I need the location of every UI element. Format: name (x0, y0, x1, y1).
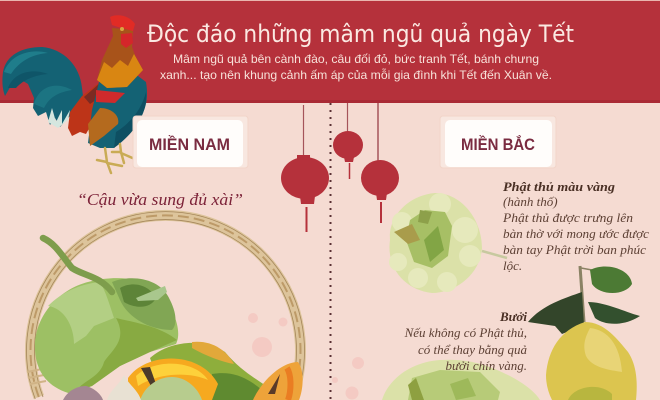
text: phat thu (502, 179, 649, 273)
text: phat thu: bàn thờ với mong ước được (503, 226, 649, 241)
buddha hand fruit: upper (389, 193, 507, 293)
text: phat thu: (hành thố) (503, 194, 558, 209)
text: phat thu: lộc. (503, 258, 522, 273)
quote: “Cậu vừa sung đủ xài” (77, 190, 243, 209)
text: buoi: bưởi chín vàng. (445, 358, 527, 373)
text: buoi: Bưởi (499, 309, 527, 324)
center dotted divider (330, 103, 332, 400)
sugar apple (140, 377, 202, 400)
buddha hand fruit: lower (382, 360, 540, 400)
blossoms decoration (248, 313, 364, 400)
text: phat thu: Phật thủ màu vàng (503, 179, 616, 194)
intro text (160, 52, 552, 82)
coconut (35, 238, 178, 394)
label: mien nam (133, 116, 248, 168)
label: mien nam: MIỀN NAM (149, 135, 230, 154)
rooster tail (2, 47, 84, 128)
header banner (0, 0, 660, 103)
text: phat thu: bàn tay Phật trời ban phúc (503, 242, 646, 257)
rooster neck (97, 28, 143, 88)
papaya (128, 342, 303, 400)
figs (63, 375, 141, 400)
label: mien bac (440, 116, 556, 168)
icon: small lantern (333, 103, 363, 179)
rooster legs (97, 144, 137, 173)
rooster saddle (68, 82, 104, 136)
intro text: xanh... tạo nên khung cảnh ấm áp của mỗi gia đình khi Tết đến Xuân về. (160, 67, 552, 82)
text: phat thu: Phật thủ được trưng lên (502, 210, 633, 225)
text: buoi: có thể thay bằng quả (418, 342, 527, 357)
intro text: Mâm ngũ quả bên cành đào, câu đối đỏ, bức tranh Tết, bánh chưng (173, 52, 539, 66)
pomelo (528, 266, 640, 400)
icon: medium lantern (361, 103, 399, 223)
icon: rooster (2, 15, 147, 173)
text: buoi: Nếu không có Phật thủ, (404, 325, 527, 340)
rooster head and comb (110, 15, 135, 31)
title: Độc đáo những mâm ngũ quả ngày Tết (147, 20, 574, 48)
text: buoi (404, 309, 527, 373)
rooster body (88, 70, 147, 148)
label: mien bac: MIỀN BẮC (461, 135, 535, 154)
basket handle (26, 212, 304, 399)
icon: large lantern (281, 105, 329, 232)
